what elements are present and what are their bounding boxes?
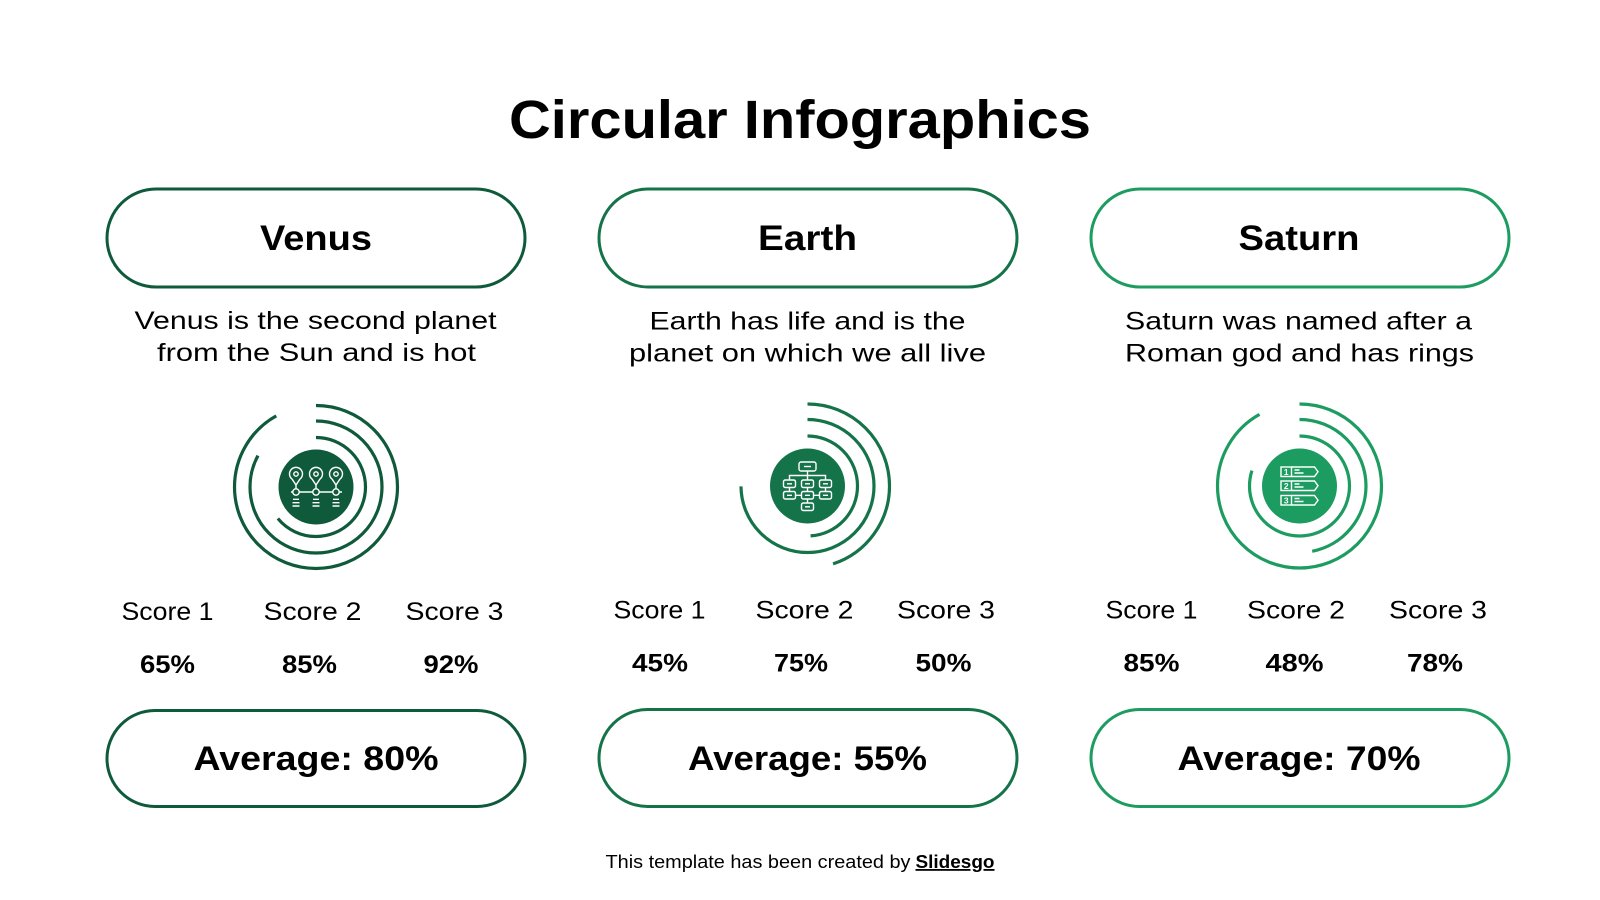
- description: Saturn: Roman god and has rings: [1125, 340, 1474, 368]
- icon: flow chart: [770, 448, 845, 524]
- radial chart: Venus: [234, 406, 398, 568]
- icon: numbered list: 1: [1284, 467, 1289, 477]
- icon: map pins timeline: [278, 450, 354, 524]
- score values: Earth: 45%: [632, 650, 688, 678]
- score labels: Venus: [122, 598, 504, 626]
- panel: Saturn: [1091, 189, 1509, 806]
- heading pill: Earth: [599, 189, 1017, 287]
- score labels: Saturn: Score 1: [1106, 596, 1198, 624]
- heading pill: Venus: Venus: [260, 219, 372, 258]
- average pill: Venus: Average: 80%: [194, 740, 438, 778]
- description: Venus: Venus is the second planet: [134, 307, 497, 335]
- description: Venus: from the Sun and is hot: [157, 339, 476, 367]
- score labels: Earth: Score 3: [897, 596, 995, 624]
- score values: Venus: 85%: [282, 651, 337, 679]
- score labels: Saturn: [1106, 596, 1487, 624]
- panel: Venus: [107, 189, 525, 806]
- average pill: Earth: [599, 710, 1017, 806]
- score values: Saturn: 48%: [1266, 650, 1324, 678]
- title: Circular Infographics: [509, 90, 1091, 150]
- score labels: Venus: Score 2: [264, 598, 362, 626]
- description: Earth: [629, 308, 986, 368]
- score labels: Earth: Score 2: [756, 596, 854, 624]
- score values: Earth: 50%: [916, 650, 972, 678]
- radial chart: Earth: [726, 404, 890, 568]
- average pill: Saturn: [1091, 710, 1509, 806]
- panel: Earth: [599, 189, 1017, 806]
- score values: Saturn: 85%: [1124, 650, 1180, 678]
- score values: Saturn: 78%: [1407, 650, 1463, 678]
- score values: Saturn: [1124, 650, 1463, 678]
- heading pill: Saturn: Saturn: [1238, 219, 1360, 258]
- score values: Venus: 92%: [424, 651, 478, 679]
- score labels: Earth: [614, 596, 995, 624]
- radial chart: Saturn: [1218, 404, 1382, 568]
- footer credit: This template has been created by: [606, 852, 910, 872]
- heading pill: Saturn: [1091, 189, 1509, 287]
- score labels: Venus: Score 1: [122, 598, 214, 626]
- heading pill: Earth: Earth: [758, 219, 857, 258]
- icon: numbered list: 3: [1284, 495, 1289, 505]
- description: Saturn: Saturn was named after a: [1125, 308, 1472, 336]
- average pill: Venus: [107, 710, 525, 806]
- description: Venus: [134, 307, 497, 367]
- score values: Venus: 65%: [140, 651, 195, 679]
- icon: numbered list: [1262, 448, 1337, 524]
- average pill: Saturn: Average: 70%: [1178, 740, 1420, 778]
- score labels: Earth: Score 1: [614, 596, 706, 624]
- footer credit: Slidesgo: [916, 852, 995, 872]
- score values: Earth: [632, 650, 972, 678]
- heading pill: Venus: [107, 189, 525, 287]
- score values: Earth: 75%: [774, 650, 828, 678]
- average pill: Earth: Average: 55%: [688, 740, 927, 778]
- description: Earth: Earth has life and is the: [650, 308, 966, 336]
- score labels: Saturn: Score 2: [1247, 596, 1345, 624]
- description: Earth: planet on which we all live: [629, 340, 986, 368]
- score labels: Venus: Score 3: [406, 598, 504, 626]
- icon: numbered list: 2: [1284, 481, 1289, 491]
- score labels: Saturn: Score 3: [1389, 596, 1487, 624]
- description: Saturn: [1125, 308, 1474, 368]
- score values: Venus: [140, 651, 478, 679]
